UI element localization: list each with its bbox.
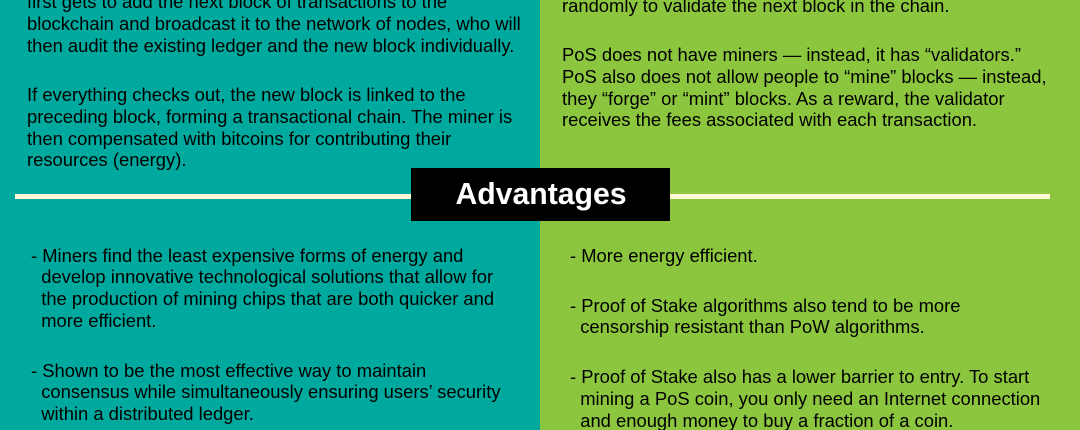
heading: Advantages xyxy=(411,168,671,221)
text block: PoW advantage on consensus: - Shown to be the most effective way to maintain xyxy=(31,360,426,380)
panel: proof of work (teal) xyxy=(0,0,540,430)
text block: PoS validators and fees: they “forge” or “mint” blocks. As a reward, the validator xyxy=(562,88,1005,109)
text block: PoW advantage on energy and chips xyxy=(31,244,494,331)
text block: PoS advantage on entry barrier: - Proof of Stake also has a lower barrier to entry. To start xyxy=(570,366,1029,387)
text block: PoW audit description: blockchain and broadcast it to the network of nodes, who will xyxy=(27,13,521,34)
text block: PoW chain linking and reward: preceding block, forming a transactional chain. The miner is xyxy=(27,106,512,127)
text block: PoW advantage on energy and chips: - Miners find the least expensive forms of energy and xyxy=(31,244,463,266)
panel: proof of stake (green) xyxy=(540,0,1080,430)
text block: PoW advantage on consensus xyxy=(31,360,501,424)
text block: PoS validators and fees: receives the fees associated with each transaction. xyxy=(562,109,977,130)
text block: PoW advantage on energy and chips: the production of mining chips that are both quicker and xyxy=(41,288,494,309)
text block: PoS validators and fees: PoS also does not allow people to “mine” blocks — instead, xyxy=(562,66,1047,87)
text block: PoS validators and fees: PoS does not have miners — instead, it has “validators.” xyxy=(562,44,1021,65)
text block: PoW advantage on energy and chips: develop innovative technological solutions that allow for xyxy=(41,266,493,287)
text block: PoS validators and fees xyxy=(562,44,1047,130)
heading: Advantages: Advantages xyxy=(455,178,627,211)
text block: PoW chain linking and reward xyxy=(27,84,512,170)
text block: PoS advantage on energy: - More energy efficient. xyxy=(570,244,758,266)
text block: PoW audit description xyxy=(27,0,521,56)
text block: PoS advantage on entry barrier xyxy=(570,366,1040,430)
text block: PoW chain linking and reward: then compensated with bitcoins for contributing their xyxy=(27,128,451,149)
divider line xyxy=(15,194,1050,199)
text block: PoS advantage on entry barrier: mining a PoS coin, you only need an Internet connection xyxy=(580,388,1040,409)
text block: PoS advantage on censorship xyxy=(570,295,960,337)
text block: PoW advantage on energy and chips: more efficient. xyxy=(41,310,156,331)
text block: PoW advantage on consensus: consensus while simultaneously ensuring users’ security xyxy=(41,381,501,402)
text block: PoS advantage on censorship: - Proof of Stake algorithms also tend to be more xyxy=(570,295,960,316)
text block: PoW advantage on consensus: within a distributed ledger. xyxy=(41,403,254,424)
text block: PoW chain linking and reward: resources (energy). xyxy=(27,149,186,170)
text block: PoW chain linking and reward: If everything checks out, the new block is linked to the xyxy=(27,84,466,105)
text block: PoW audit description: then audit the existing ledger and the new block individually. xyxy=(27,35,514,56)
text block: PoS advantage on censorship: censorship resistant than PoW algorithms. xyxy=(580,316,925,337)
